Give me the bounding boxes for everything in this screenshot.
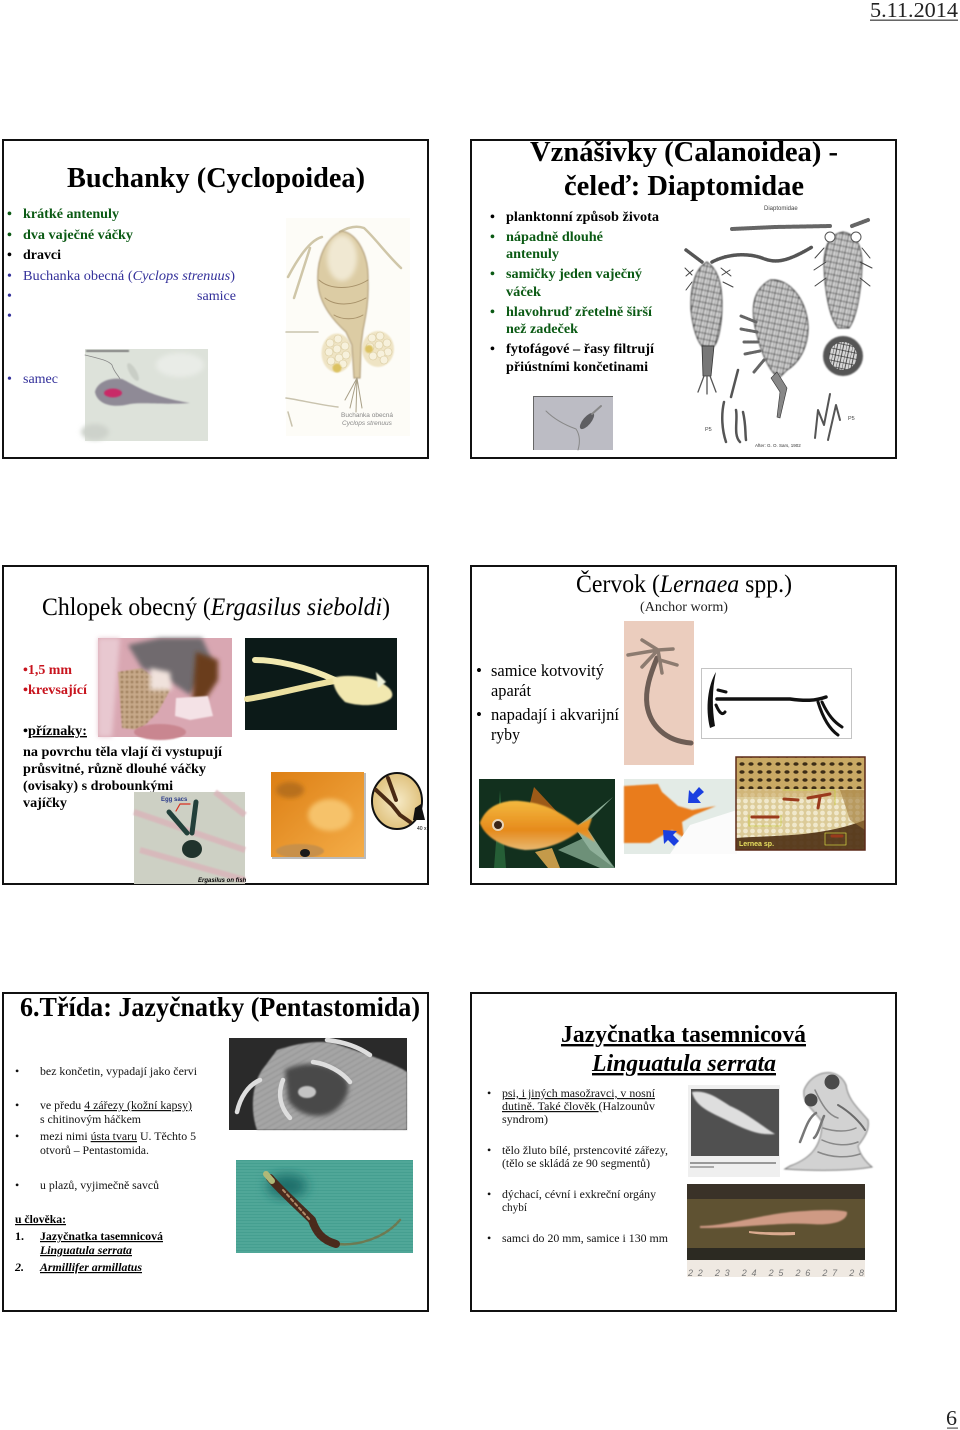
photo: microscope circle: 40 x: [417, 826, 427, 832]
bullet list: Linguatula traits: •: [487, 1143, 491, 1157]
page number: 6: [946, 1406, 957, 1430]
bullet list: Linguatula traits: samci do 20 mm, samice i 130 mm: [502, 1231, 669, 1245]
bullet list: Jazyčnatky: •: [15, 1129, 19, 1143]
bullet list: Červok: [476, 661, 619, 744]
bullet list: Vznášivky traits: •: [490, 210, 495, 225]
text: symptoms: na povrchu těla vlají či vystupují: [23, 745, 223, 760]
list: u člověka: 1.: [15, 1229, 24, 1243]
panel: Červok (Lernaea): [471, 566, 896, 884]
bullet list: Jazyčnatky: bez končetin, vypadají jako červi: [40, 1064, 198, 1078]
panel: Jazyčnatka tasemnicová: [471, 993, 896, 1311]
P5 appendages: [722, 370, 746, 442]
illustration: fantasy parasite creature: [785, 1073, 872, 1170]
subtitle: Anchor worm: (Anchor worm): [640, 600, 728, 615]
bullet list: Červok: aparát: [491, 681, 531, 700]
bullet list: Buchanky traits: •: [7, 372, 12, 387]
bullet list: Vznášivky traits: [490, 210, 659, 375]
bullet list: Buchanky traits: dravci: [23, 248, 61, 263]
bullet list: Vznášivky traits: samičky jeden vaječný: [506, 267, 642, 282]
bullet list: Linguatula traits: dýchací, cévní i exkreční orgány: [502, 1187, 656, 1201]
bullet list: Vznášivky traits: hlavohruď zřetelně širší: [506, 305, 653, 320]
illustration: Diaptomidae drawings: P5: [848, 416, 855, 422]
title: Chlopek: Chlopek obecný (Ergasilus sieboldi): [42, 594, 390, 621]
bullet list: Buchanky traits: •: [7, 248, 12, 263]
bullet list: Vznášivky traits: fytofágové – řasy filtrují: [506, 342, 655, 357]
photo: microscope circle: [372, 773, 427, 832]
illustration: Diaptomidae drawings: P5: [705, 427, 712, 433]
bullet list: Vznášivky traits: antenuly: [506, 247, 559, 262]
photo: Ergasilus on black: [245, 638, 397, 730]
title: Jazyčnatky: 6.Třída: Jazyčnatky (Pentastomida): [20, 992, 420, 1022]
text: size and feeding: [23, 663, 88, 698]
list: u člověka: 2.: [14, 1260, 24, 1274]
panel: Chlopek obecný: [3, 566, 428, 884]
photo: Lernaea on fish skin: Lernea sp.: [739, 841, 774, 848]
bullet list: Linguatula traits: chybí: [502, 1200, 528, 1214]
photo: Linguatula grey plate: [688, 1085, 780, 1177]
bullet list: Vznášivky traits: •: [490, 267, 495, 282]
list: u člověka: u člověka:: [15, 1212, 66, 1226]
illustration: female cyclops with egg sacs: Cyclops strenuus: [342, 420, 393, 427]
bullet list: Linguatula traits: •: [487, 1086, 491, 1100]
bullet list: Jazyčnatky: ve předu 4 zářezy (kožní kapsy): [40, 1098, 192, 1112]
text: symptoms: vajíčky: [23, 796, 67, 811]
bullet list: Červok: •: [476, 661, 482, 680]
bullet list: Vznášivky traits: planktonní způsob života: [506, 210, 659, 225]
list: u člověka: Armillifer armillatus: [39, 1260, 142, 1274]
bullet list: Vznášivky traits: •: [490, 230, 495, 245]
bullet list: Vznášivky traits: váček: [506, 285, 541, 300]
illustration: Diaptomidae drawings: Diaptomidae: [764, 206, 798, 212]
photo: Lernaea on fish skin: [736, 757, 865, 850]
bullet list: Buchanky traits: samec: [23, 372, 58, 387]
title: Jazyčnatka tasemnicová: Linguatula serrata: [591, 1051, 776, 1077]
bullet list: Vznášivky traits: •: [490, 305, 495, 320]
photo: goldfish: [479, 779, 615, 868]
bullet list: Jazyčnatky: [15, 1064, 198, 1192]
bullet list: Linguatula traits: •: [487, 1187, 491, 1201]
bullet list: Linguatula traits: syndrom): [502, 1112, 548, 1126]
photo: fish tail with blue arrows: [624, 779, 737, 854]
bullet list: Buchanky traits: •: [7, 269, 12, 284]
list: u člověka: Linguatula serrata: [39, 1243, 132, 1257]
bullet list: Linguatula traits: [487, 1086, 669, 1245]
male, left: [691, 262, 722, 346]
bullet list: Vznášivky traits: nápadně dlouhé: [506, 230, 603, 245]
bullet list: Červok: •: [476, 705, 482, 724]
egg sac: right: [362, 331, 394, 367]
bullet list: Červok: samice kotvovitý: [491, 661, 604, 680]
panel: Buchanky (Cyclopoidea): [3, 140, 428, 458]
bullet list: Buchanky traits: Buchanka obecná (Cyclops strenuus): [23, 269, 235, 284]
photo: pentastomid worm on teal cloth: [236, 1160, 413, 1253]
photo: adult worms with ruler: [687, 1184, 865, 1278]
bullet list: Linguatula traits: dutině. Také člověk (Halzounův: [502, 1099, 655, 1113]
bullet list: Vznášivky traits: přiústními končetinami: [506, 360, 648, 375]
bullet list: Linguatula traits: tělo žluto bílé, prstencovité zářezy,: [502, 1143, 668, 1157]
bullet list: Linguatula traits: •: [487, 1231, 491, 1245]
bullet list: Buchanky traits: •: [7, 228, 12, 243]
photo: male cyclops under microscope: [81, 349, 208, 441]
photo: pentastomid head SEM: [229, 1038, 407, 1130]
text: size and feeding: •1,5 mm: [23, 663, 72, 678]
bullet list: Buchanky traits: •: [7, 309, 12, 324]
egg sac: left: [322, 334, 352, 372]
bullet list: Buchanky traits: samice: [197, 289, 236, 304]
title: Jazyčnatka tasemnicová: Jazyčnatka tasemnicová: [561, 1022, 806, 1048]
illustration: female cyclops with egg sacs: Buchanka obecná: [341, 412, 393, 419]
illustration: female cyclops with egg sacs: [286, 218, 410, 436]
text: symptoms: [23, 724, 223, 811]
panel: Vznášivky (Calanoidea): [471, 136, 896, 458]
bullet list: Buchanky traits: dva vaječné váčky: [23, 228, 133, 243]
photo: egg sacs on fish: Egg sacs: [161, 797, 188, 803]
bullet list: Vznášivky traits: •: [490, 342, 495, 357]
title: Jazyčnatka tasemnicová: [561, 1022, 806, 1077]
bullet list: Buchanky traits: •: [7, 289, 12, 304]
bullet list: Buchanky traits: krátké antenuly: [23, 207, 119, 222]
photo: infested gills: [98, 638, 232, 740]
text: size and feeding: •krevsající: [23, 683, 88, 698]
text: symptoms: (ovisaky) s drobounkými: [23, 779, 173, 794]
text: symptoms: průsvitné, různě dlouhé váčky: [23, 762, 206, 777]
title: Červok: Červok (Lernaea spp.): [576, 570, 792, 598]
body: [318, 231, 368, 378]
bullet list: Buchanky traits: •: [7, 207, 12, 222]
photo: adult worms with ruler: 22 23 24 25 26 27 28: [687, 1268, 864, 1278]
female side view, centre: [753, 280, 808, 378]
bullet list: Jazyčnatky: u plazů, vyjimečně savců: [40, 1178, 159, 1192]
bullet list: Jazyčnatky: •: [15, 1064, 19, 1078]
drawing: anchor worm outline: [702, 668, 852, 738]
title: Vznášivky: [530, 136, 838, 202]
title: Vznášivky: čeleď: Diaptomidae: [564, 170, 804, 202]
list: u člověka: Jazyčnatka tasemnicová: [40, 1229, 163, 1243]
female dorsal, right: [824, 232, 862, 328]
bullet list: Jazyčnatky: otvorů – Pentastomida.: [40, 1143, 149, 1157]
photo: egg sacs on fish: Ergasilus on fish: [198, 878, 247, 884]
photo: egg sacs on fish: [134, 792, 247, 884]
text: symptoms: •příznaky:: [23, 724, 87, 739]
bullet list: Jazyčnatky: s chitinovým háčkem: [40, 1112, 142, 1126]
bullet list: Linguatula traits: (tělo se skládá ze 90 segmentů): [502, 1156, 650, 1170]
bullet list: Jazyčnatky: •: [15, 1178, 19, 1192]
bullet list: Linguatula traits: psi, i jiných masožravci, v nosní: [502, 1086, 656, 1100]
bullet list: Červok: napadají i akvarijní: [491, 705, 619, 724]
illustration: Diaptomidae drawings: [685, 206, 872, 448]
photo: grey copepod: [533, 396, 613, 450]
icon: blue arrow bottom: [663, 830, 679, 846]
title: Vznášivky: Vznášivky (Calanoidea) -: [530, 136, 838, 168]
icon: blue arrow top: [688, 787, 704, 803]
bullet list: Buchanky traits: [7, 207, 236, 387]
bullet list: Jazyčnatky: mezi nimi ústa tvaru U. Těchto 5: [40, 1129, 196, 1143]
photo: orange fish skin: [271, 772, 366, 859]
bullet list: Jazyčnatky: •: [15, 1098, 19, 1112]
panel: Třída Jazyčnatky: [3, 992, 428, 1311]
bullet list: Červok: ryby: [491, 725, 520, 744]
illustration: Diaptomidae drawings: After: G. O. Sars, 1902: [755, 443, 801, 448]
title: Buchanky: Buchanky (Cyclopoidea): [67, 162, 365, 194]
bullet list: Vznášivky traits: než zadeček: [506, 322, 578, 337]
photo: anchor worm on pink: [624, 621, 694, 765]
list: u člověka: [14, 1212, 163, 1274]
